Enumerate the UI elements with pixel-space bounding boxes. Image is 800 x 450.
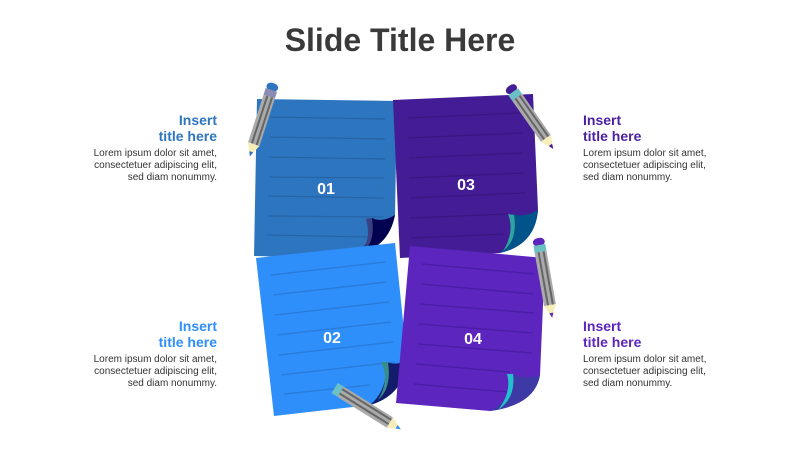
text block: 02: Insert xyxy=(179,318,217,334)
text block: 02: sed diam nonummy. xyxy=(128,378,217,389)
text block: 03: Lorem ipsum dolor sit amet, xyxy=(583,148,706,159)
note 04 xyxy=(396,246,545,411)
text block: 03: Insert xyxy=(583,112,621,128)
text block: 01 xyxy=(94,112,217,183)
text block: 02 xyxy=(94,318,217,389)
text block: 02: consectetuer adipiscing elit, xyxy=(94,366,217,377)
text block: 04: title here xyxy=(583,334,641,350)
text block: 04: Insert xyxy=(583,318,621,334)
text block: 02: title here xyxy=(159,334,217,350)
note 03 xyxy=(393,94,538,258)
text block: 04: consectetuer adipiscing elit, xyxy=(583,366,706,377)
text block: 01: consectetuer adipiscing elit, xyxy=(94,160,217,171)
text block: 01: Insert xyxy=(179,112,217,128)
title: Slide Title Here xyxy=(285,22,515,58)
text block: 01: sed diam nonummy. xyxy=(128,172,217,183)
note 02 xyxy=(256,243,407,416)
text block: 04: sed diam nonummy. xyxy=(583,378,672,389)
text block: 04 xyxy=(583,318,706,389)
icon: pencil 02 xyxy=(332,383,404,434)
text block: 02: Lorem ipsum dolor sit amet, xyxy=(94,354,217,365)
text block: 04: Lorem ipsum dolor sit amet, xyxy=(583,354,706,365)
text block: 03: title here xyxy=(583,128,641,144)
note 02: 02 xyxy=(323,330,341,347)
text block: 03: sed diam nonummy. xyxy=(583,172,672,183)
note 01 xyxy=(254,99,397,258)
icon: pencil 04 xyxy=(532,237,558,319)
note 03: 03 xyxy=(457,177,475,194)
note 04: 04 xyxy=(464,331,482,348)
text block: 01: title here xyxy=(159,128,217,144)
icon: pencil 01 xyxy=(244,81,279,158)
text block: 03: consectetuer adipiscing elit, xyxy=(583,160,706,171)
text block: 03 xyxy=(583,112,706,183)
text block: 01: Lorem ipsum dolor sit amet, xyxy=(94,148,217,159)
note 01: 01 xyxy=(317,181,335,198)
icon: pencil 03 xyxy=(504,82,558,152)
